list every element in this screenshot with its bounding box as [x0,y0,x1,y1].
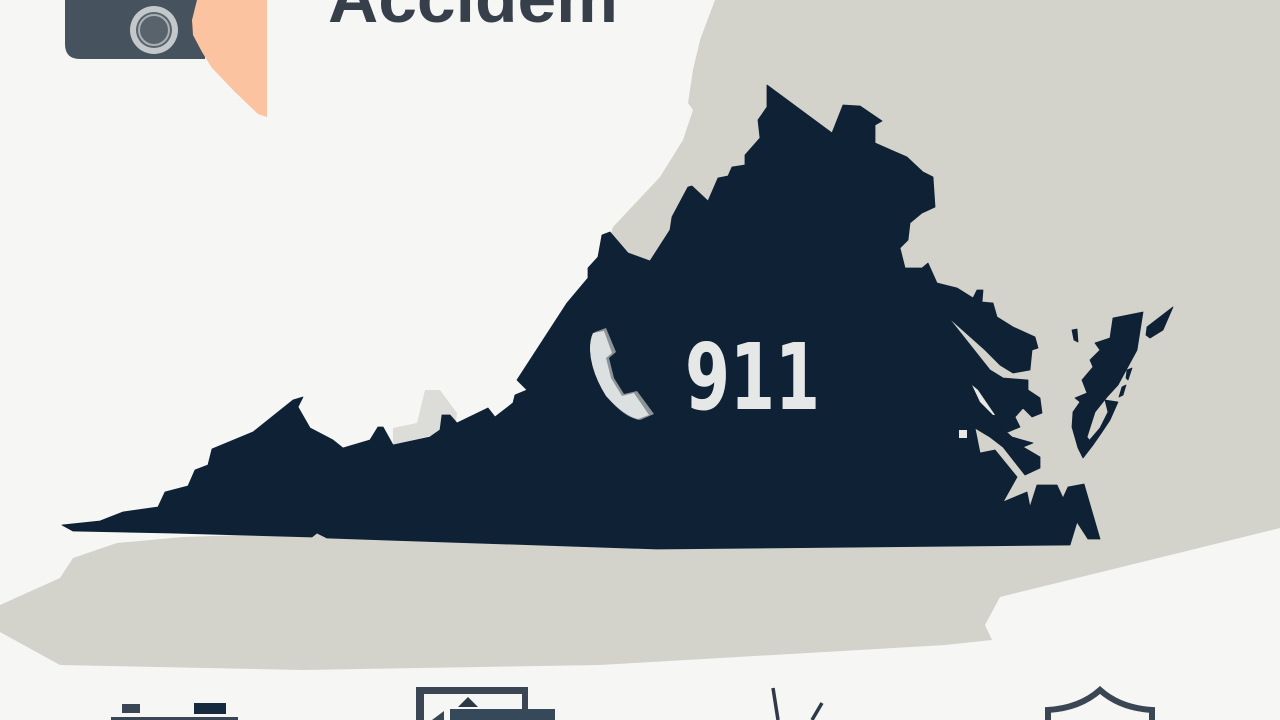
icon: signal lines cropped at bottom [773,688,822,720]
911 number: 911 [685,324,820,431]
small islet south [1119,385,1126,397]
small islet east [1126,368,1132,380]
camera lens [130,6,178,54]
camera icon cropped at top [65,0,267,117]
icon: document with image cropped at bottom [416,687,555,720]
river inlet sliver [972,385,995,415]
mainland silhouette [62,85,1100,549]
icon: telephone handset [590,328,654,420]
finger holding camera [192,0,267,117]
emergency number group [590,324,820,431]
icon: battery cropped at bottom [111,703,238,720]
pale shadow blob [393,390,457,445]
barrier strip [1088,400,1118,445]
icon: shield cropped at bottom [1048,690,1152,720]
eastern shore peninsula [1072,312,1143,458]
map of Virginia [62,85,1173,549]
small inlet square [959,430,967,438]
camera body [65,0,205,59]
offshore island [1146,307,1173,338]
small islet west [1072,329,1078,342]
